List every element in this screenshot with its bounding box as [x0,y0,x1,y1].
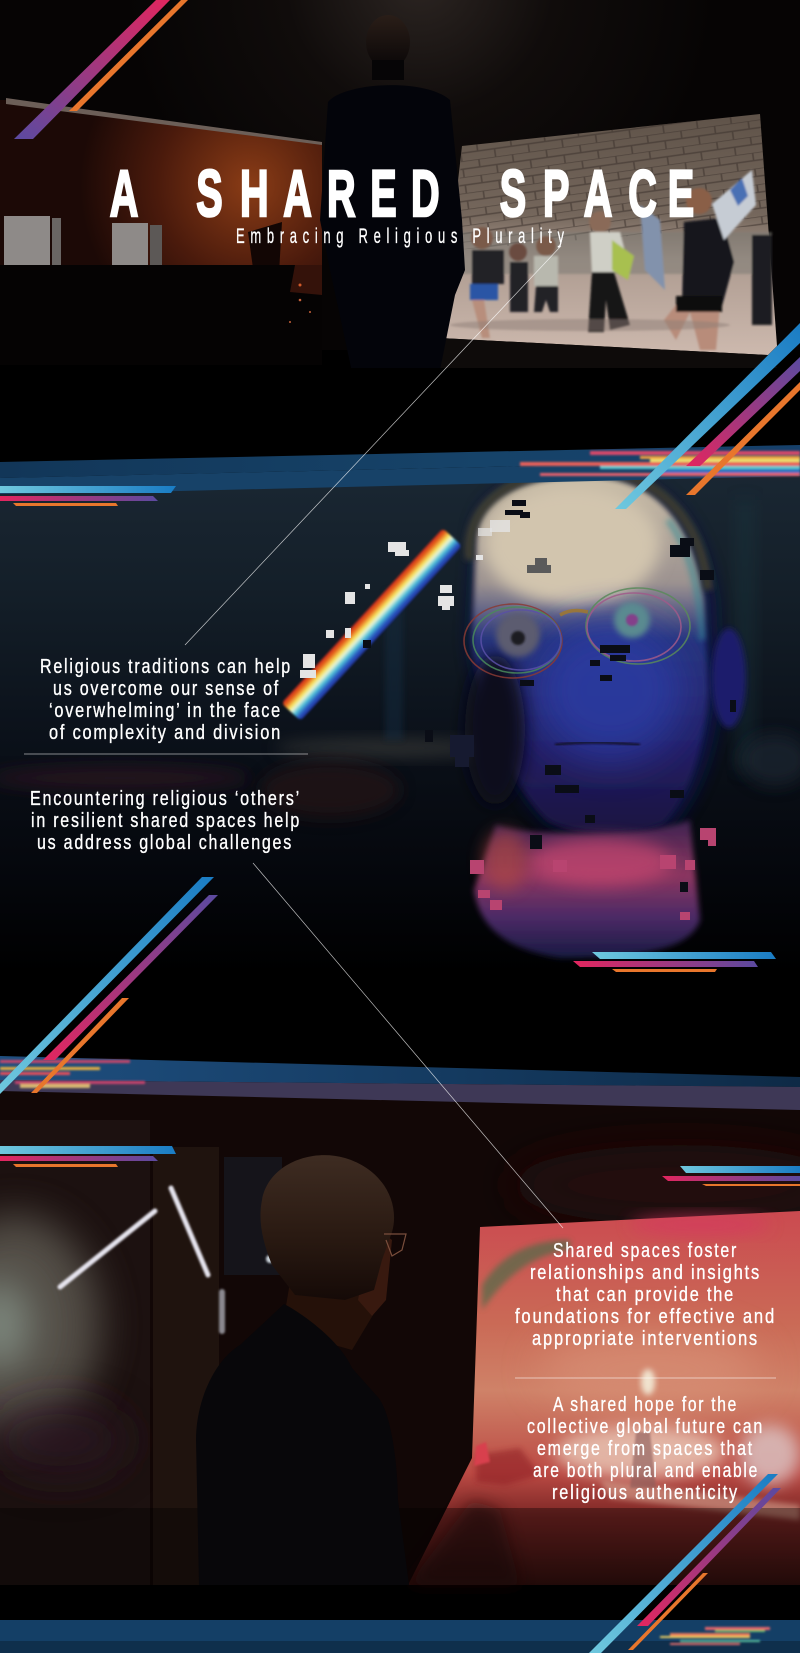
panel: portrait with rainbow [0,470,800,1000]
crowd figure: black shirt [664,188,734,350]
glasses [464,588,690,678]
ear [712,628,746,728]
dark navy background [0,470,800,1000]
stripes: right horizontal [662,1166,800,1186]
eyes [496,602,650,657]
divider left [24,754,308,755]
text block: foster relationships: that can provide the [556,1284,735,1306]
text block: traditions: us overcome our sense of [53,678,280,700]
title: A SHARED SPACE [110,157,694,231]
text block: traditions: Religious traditions can help [40,656,292,678]
stripes: left horizontal [0,1146,176,1167]
neon rods [60,1188,222,1331]
man from behind [196,1155,409,1585]
glasses [384,1234,406,1256]
leader line: header to first text [185,246,561,645]
divider right [515,1378,776,1379]
panel: stage photo header [0,0,800,458]
crowd figure: blue shorts [470,227,504,338]
text block: foster relationships [515,1240,776,1350]
text block: encountering others [30,788,301,854]
left fire screen [0,98,322,365]
stripes: right diagonal [615,323,800,509]
floor shadow under stage [440,338,780,372]
dark lower gradient band [0,1508,800,1585]
jacket [196,1304,409,1585]
hair [260,1155,394,1300]
text block: traditions: ‘overwhelming’ in the face [49,700,282,722]
dark window [224,1157,282,1275]
right crowd screen [440,114,777,355]
band: section 3 top strip [0,1056,800,1110]
pillar [153,1147,219,1585]
subtitle: Embracing Religious Plurality [236,224,564,248]
stripes: top-left diagonal header [14,0,188,139]
text block: shared hope: religious authenticity [552,1482,739,1504]
text block: traditions: of complexity and division [49,722,282,744]
decorative stripes: section 2 [0,0,800,972]
stage room backdrop [0,0,800,350]
text block: shared hope: A shared hope for the [553,1394,738,1416]
lower floor fade [0,368,800,458]
panel: man facing fire screen [0,1085,800,1585]
neck [282,1262,382,1350]
mouth [555,742,640,745]
rainbow glitch streaks [520,451,800,476]
crowd figure: dark trousers [509,236,558,312]
text block: traditions [40,656,292,744]
band: section 2 top strip [0,445,800,494]
left light flare [0,1120,150,1585]
stripes: bottom right diagonal [589,1474,781,1653]
silhouette: man from behind [320,15,465,372]
text block: shared hope [527,1394,764,1504]
text block: encountering others: in resilient shared spaces help [31,810,301,832]
crowd figure: white shirt [588,211,634,332]
hair edge [469,470,708,590]
neck [474,820,700,958]
flag [640,170,772,325]
warm dark background [0,1085,800,1585]
band: footer strip [0,1620,800,1653]
text block: foster relationships: Shared spaces foster [553,1240,738,1262]
rainbow glitch streaks [0,1060,145,1088]
text block: encountering others: us address global challenges [37,832,293,854]
stripes: left horizontal [0,486,176,506]
red tint behind [510,1145,800,1225]
rainbow glitch streaks [660,1627,770,1645]
text block: foster relationships: appropriate interventions [532,1328,759,1350]
background haze [0,500,800,818]
stripes: lower left diagonal [0,877,218,1094]
leader line: second text to third text [253,863,563,1228]
rainbow beam [281,528,462,721]
face portrait [464,470,746,958]
text block: encountering others: Encountering religious ‘others’ [30,788,301,810]
face edge [358,1225,392,1316]
pixel debris [300,500,736,920]
fire screen [408,1211,800,1585]
stripes: lower right horizontal [573,952,776,972]
decorative stripes: section 3 [0,877,800,1653]
